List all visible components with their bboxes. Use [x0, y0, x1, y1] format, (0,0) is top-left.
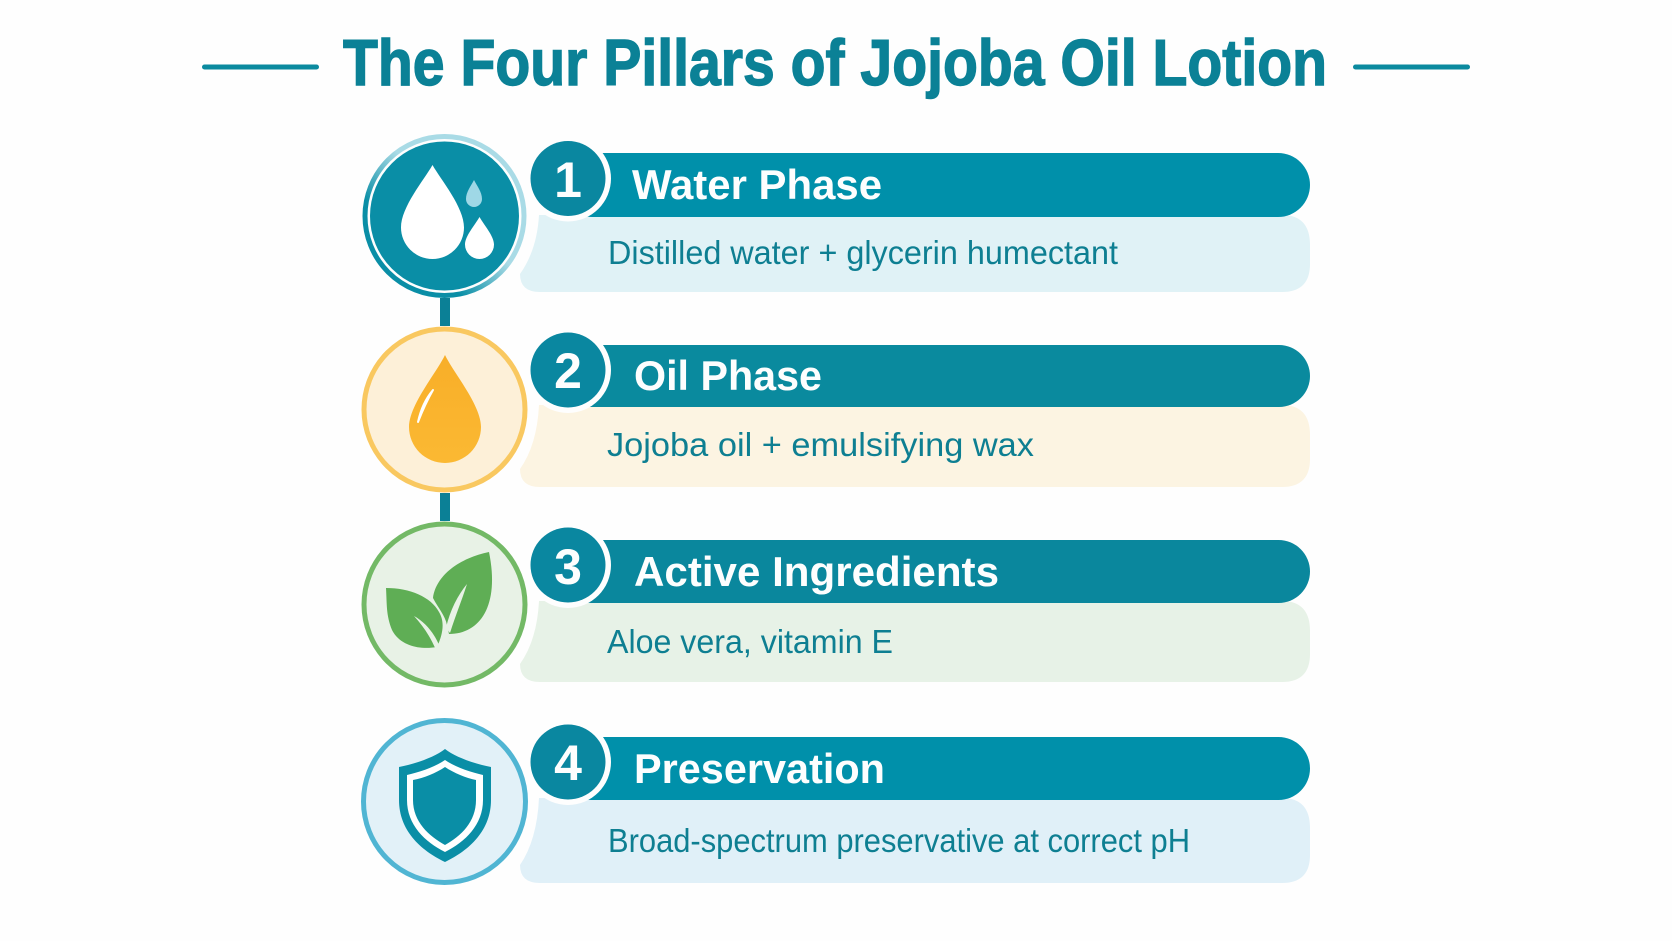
number badge 2: 2	[554, 343, 582, 399]
panel: oil phase	[356, 322, 1310, 498]
number badge 1: 1	[554, 152, 582, 208]
number badge 3	[525, 522, 611, 608]
active ingredients description: Aloe vera, vitamin E	[607, 623, 893, 660]
active ingredients heading: Active Ingredients	[634, 548, 999, 595]
icon: water drops	[356, 128, 532, 304]
icon: oil drop	[356, 322, 532, 498]
panel: water phase	[356, 128, 1310, 304]
active ingredients header bar	[560, 540, 1310, 603]
water phase description band	[520, 215, 1310, 292]
preservation description: Broad-spectrum preservative at correct pH	[608, 822, 1190, 859]
oil phase description: Jojoba oil + emulsifying wax	[607, 426, 1035, 463]
icon: shield	[356, 714, 532, 890]
connector lines	[440, 298, 450, 521]
number badge 4: 4	[554, 735, 582, 791]
title: The Four Pillars of Jojoba Oil Lotion	[343, 26, 1327, 99]
water phase header bar	[560, 153, 1310, 217]
oil phase description band	[520, 405, 1310, 487]
panel: preservation	[356, 714, 1310, 890]
number badge 4	[525, 719, 611, 805]
number badge 2	[525, 327, 611, 413]
preservation heading: Preservation	[634, 745, 885, 792]
preservation description band	[520, 798, 1310, 883]
water phase description: Distilled water + glycerin humectant	[608, 234, 1118, 271]
oil phase header bar	[560, 345, 1310, 407]
panel: active ingredients	[356, 516, 1310, 692]
active ingredients description band	[520, 601, 1310, 682]
oil phase heading: Oil Phase	[634, 352, 822, 399]
number badge 1	[525, 136, 611, 222]
number badge 3: 3	[554, 539, 582, 595]
icon: leaves	[356, 516, 532, 692]
water phase heading: Water Phase	[632, 161, 882, 208]
preservation header bar	[560, 737, 1310, 800]
